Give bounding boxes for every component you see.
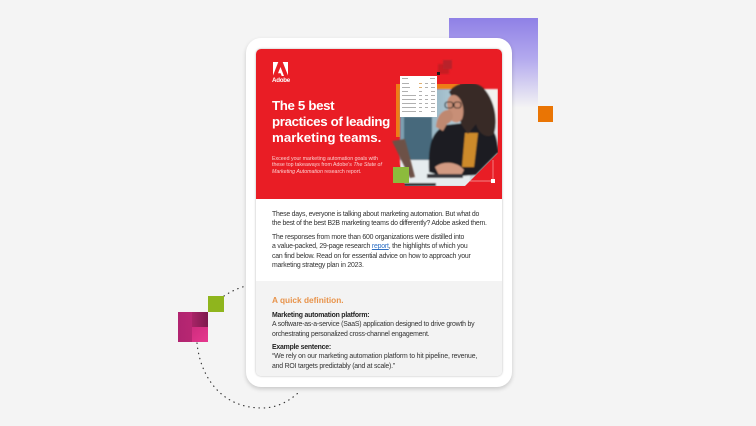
logo: Adobe [272, 62, 290, 84]
title: practices of leading [272, 114, 390, 129]
intro text: These days, everyone is talking about marketing automation. But what do [272, 211, 479, 218]
intro text [272, 210, 487, 227]
subtitle [272, 156, 382, 175]
heading: A quick definition. [272, 295, 344, 305]
subtitle: Marketing Automation research report. [272, 169, 361, 175]
purple gradient square [449, 18, 538, 108]
research text: a value-packed, 29-page research report, the highlights of which you [272, 243, 468, 250]
photo: woman at laptop with table overlay [392, 60, 498, 186]
research text: marketing strategy plan in 2023. [272, 262, 364, 269]
hair [449, 83, 496, 136]
example sentence [272, 344, 477, 370]
tablet frame [246, 38, 512, 387]
dotted arc [196, 286, 298, 408]
photo scene [400, 83, 498, 189]
table overlay [400, 76, 437, 117]
subtitle: Exceed your marketing automation goals with [272, 156, 378, 162]
example sentence: “We rely on our marketing automation platform to hit pipeline, revenue, [272, 353, 477, 360]
lower hand [435, 163, 464, 177]
laptop [392, 139, 415, 178]
green tile [393, 167, 409, 183]
black dot [437, 72, 440, 75]
keyboard [427, 174, 463, 178]
definition: A software-as-a-service (SaaS) application designed to drive growth by [272, 321, 474, 328]
document page [256, 49, 502, 376]
magenta square [178, 312, 208, 342]
title: marketing teams. [272, 130, 381, 145]
definition: Marketing automation platform: [272, 312, 369, 319]
definition [272, 312, 474, 338]
raised hand [436, 110, 453, 131]
green square [208, 296, 224, 312]
panel: red hero [256, 49, 502, 199]
glasses [445, 102, 453, 108]
title [272, 98, 390, 145]
orange top [462, 133, 478, 167]
dark red accent squares [438, 60, 452, 74]
example sentence: Example sentence: [272, 344, 331, 351]
panel: a quick definition [256, 281, 502, 376]
title: The 5 best [272, 98, 334, 113]
intro text: the best of the best B2B marketing teams do differently? Adobe asked them. [272, 220, 487, 227]
orange strip [396, 84, 460, 137]
definition: orchestrating personalized cross-channel engagement. [272, 331, 429, 338]
corner marker [470, 160, 495, 183]
subtitle: these top takeaways from Adobe’s The State of [272, 162, 382, 168]
research text: can find below. Read on for essential advice on how to approach your [272, 252, 471, 260]
research text [272, 234, 471, 269]
example sentence: and ROI targets predictably (and at scale).” [272, 363, 395, 370]
face [447, 95, 463, 122]
logo: Adobe: Adobe [272, 76, 290, 84]
research text: The responses from more than 600 organizations were distilled into [272, 234, 464, 240]
orange square [538, 106, 553, 122]
jacket [429, 122, 498, 177]
